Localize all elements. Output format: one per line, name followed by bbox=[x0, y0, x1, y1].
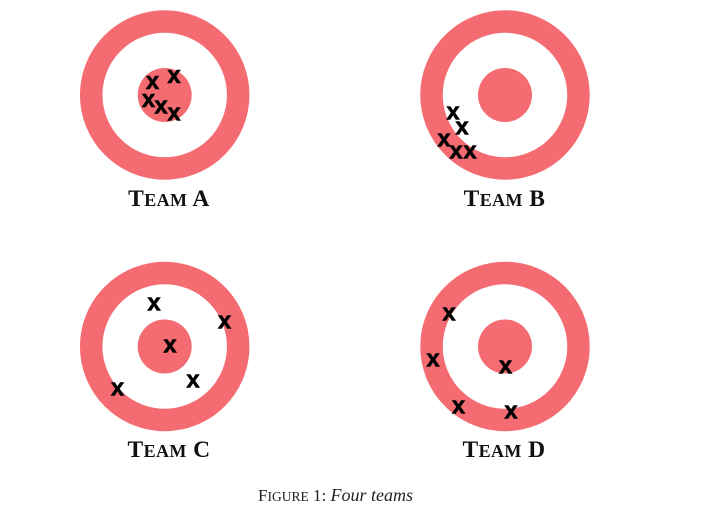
marks: Team B shots: x bbox=[463, 138, 477, 164]
marks: Team B shots: x bbox=[437, 126, 451, 152]
icon: target rings B bbox=[432, 22, 578, 168]
marks: Team B shots: x bbox=[446, 98, 460, 126]
icon: target rings C bbox=[91, 273, 238, 420]
marks: Team A shots: x bbox=[167, 100, 181, 126]
label: Team A: TEAM A bbox=[128, 186, 210, 212]
marks: Team C shots: x bbox=[111, 374, 125, 402]
panel: Team A target bbox=[91, 22, 238, 212]
marks: Team B shots: x bbox=[455, 114, 469, 140]
marks: Team C shots: x bbox=[218, 308, 232, 334]
marks: Team A shots: x bbox=[146, 68, 160, 95]
marks: Team A shots: x bbox=[142, 86, 156, 113]
marks: Team B shots: x bbox=[449, 138, 463, 164]
marks: Team B shots bbox=[437, 98, 477, 164]
marks: Team C shots: x bbox=[163, 332, 177, 358]
label: Team B: TEAM B bbox=[464, 186, 545, 212]
marks: Team C shots: x bbox=[147, 290, 161, 316]
label: Team C: TEAM C bbox=[128, 437, 210, 463]
marks: Team C shots bbox=[111, 290, 232, 402]
marks: Team D shots: x bbox=[452, 392, 466, 420]
marks: Team D shots: x bbox=[504, 398, 518, 424]
panel: Team C target bbox=[91, 273, 238, 463]
icon: target rings D bbox=[432, 273, 578, 420]
marks: Team D shots bbox=[426, 300, 518, 424]
panel: Team D target bbox=[426, 273, 578, 463]
label: Team D: TEAM D bbox=[463, 437, 545, 463]
marks: Team A shots bbox=[142, 62, 181, 126]
marks: Team D shots: x bbox=[499, 352, 513, 380]
marks: Team A shots: x bbox=[167, 62, 181, 89]
marks: Team D shots: x bbox=[442, 300, 456, 326]
icon: target rings A bbox=[91, 22, 238, 168]
panel: Team B target bbox=[432, 22, 578, 212]
marks: Team C shots: x bbox=[186, 366, 200, 394]
marks: Team D shots: x bbox=[426, 346, 440, 372]
marks: Team A shots: x bbox=[154, 92, 168, 120]
caption: FIGURE 1: Four teams bbox=[258, 485, 413, 505]
